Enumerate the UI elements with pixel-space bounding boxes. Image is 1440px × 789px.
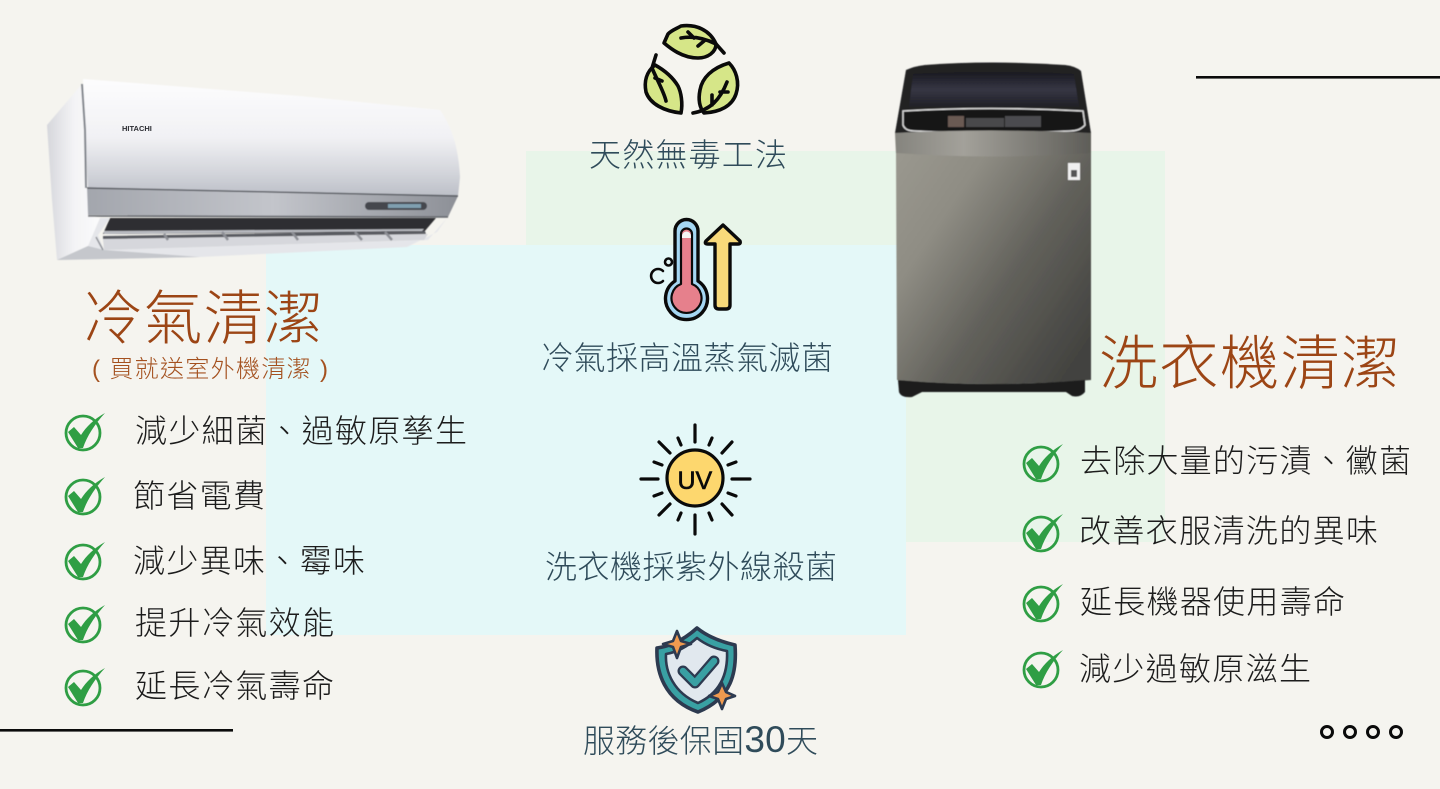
check icon 1 <box>1024 444 1063 481</box>
washing machine illustration <box>895 62 1091 397</box>
air conditioner brand: HITACHI <box>122 124 152 133</box>
check icon 2 <box>1024 514 1063 551</box>
icon part: UV label: UV <box>678 467 713 495</box>
icon part: shield inner <box>666 638 727 703</box>
item 5: 延長冷氣壽命 <box>135 668 334 704</box>
check icon 3 <box>1024 584 1063 621</box>
heading: AC steam sterilisation: 冷氣採高溫蒸氣滅菌 <box>541 340 833 376</box>
icon part: right leaf stem <box>693 82 728 113</box>
air conditioner illustration <box>47 79 460 260</box>
icon part: arrow <box>705 225 740 309</box>
icon part: celsius <box>651 258 672 283</box>
icon part: thermometer mercury <box>672 228 702 313</box>
item 2: 節省電費 <box>133 478 265 514</box>
icon part: left leaf <box>645 65 682 113</box>
decorative four dots <box>1322 726 1402 738</box>
heading: 30-day warranty: 服務後保固30天 <box>583 719 818 760</box>
item 3: 延長機器使用壽命 <box>1080 584 1345 620</box>
check icon 3 <box>66 542 105 579</box>
icon part: left leaf stem <box>652 55 666 101</box>
icon part: check mark <box>683 661 714 683</box>
check icon 2 <box>66 477 105 514</box>
icon part: top leaf <box>664 26 716 58</box>
item 1: 去除大量的污漬、黴菌 <box>1080 443 1411 479</box>
icon part: right leaf <box>699 63 738 113</box>
check icon 4 <box>66 605 105 642</box>
list: AC benefits <box>66 413 467 705</box>
list: washer benefits <box>1024 443 1411 687</box>
icon part: top leaf stem <box>681 32 724 53</box>
icon part: thermometer top <box>682 232 691 238</box>
title: AC cleaning: 冷氣清潔 <box>83 286 323 352</box>
check icon 4 <box>1024 650 1063 687</box>
icon: warranty shield <box>657 628 735 712</box>
check icon 5 <box>66 668 105 705</box>
item 1: 減少細菌、過敏原孳生 <box>135 413 467 449</box>
item 3: 減少異味、霉味 <box>133 543 365 579</box>
icon: recycled leaves <box>645 26 738 113</box>
icon: UV sun <box>641 425 750 534</box>
icon part: rays <box>641 425 750 534</box>
panel: cyan backdrop <box>266 245 906 635</box>
subtitle: AC cleaning bonus: ( 買就送室外機清潔 ) <box>92 356 328 383</box>
heading: washer UV sterilisation: 洗衣機採紫外線殺菌 <box>545 549 837 585</box>
icon part: lower sparkle <box>709 683 735 709</box>
item 2: 改善衣服清洗的異味 <box>1079 513 1378 549</box>
item 4: 減少過敏原滋生 <box>1079 651 1311 687</box>
icon: thermometer with rising arrow <box>651 220 740 320</box>
heading: natural non-toxic process: 天然無毒工法 <box>589 137 787 173</box>
icon part: shield outer <box>657 628 735 712</box>
title: washer cleaning: 洗衣機清潔 <box>1099 331 1400 397</box>
check icon 1 <box>66 413 105 450</box>
icon part: thermometer glass <box>666 220 708 320</box>
panel: green backdrop <box>526 151 1165 542</box>
accent line bottom left <box>0 729 233 732</box>
icon part: sun disc <box>667 450 723 506</box>
icon part: upper sparkle <box>663 631 691 658</box>
item 4: 提升冷氣效能 <box>135 605 334 641</box>
accent line top right <box>1196 76 1440 79</box>
